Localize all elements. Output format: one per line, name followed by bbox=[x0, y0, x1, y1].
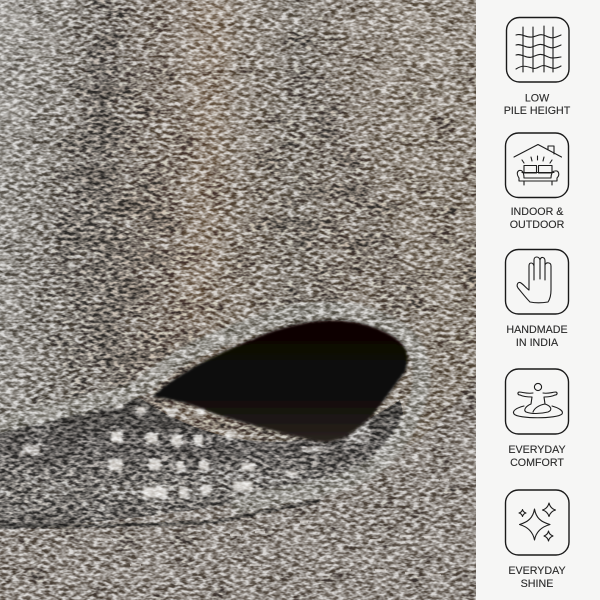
label: everyday shine: SHINE bbox=[521, 578, 553, 590]
feature: indoor and outdoor bbox=[506, 133, 568, 231]
label: low pile height: PILE HEIGHT bbox=[504, 105, 571, 117]
lower rug surface bbox=[0, 380, 476, 600]
photo: rolled rug bbox=[0, 0, 476, 600]
icon: open hand bbox=[506, 250, 568, 314]
icon: woven fibres bbox=[506, 18, 569, 82]
icon: house with sofa bbox=[506, 133, 568, 198]
label: everyday comfort: COMFORT bbox=[510, 457, 564, 469]
label: everyday comfort: EVERYDAY bbox=[508, 444, 566, 456]
feature: low pile height bbox=[504, 18, 571, 117]
label: everyday shine: EVERYDAY bbox=[508, 565, 566, 577]
label: handmade in india: IN INDIA bbox=[516, 337, 559, 349]
label: low pile height: LOW bbox=[525, 92, 550, 104]
sidebar panel bbox=[476, 0, 600, 600]
vertical stripe: warm highlight bbox=[176, 74, 221, 320]
label: indoor and outdoor: INDOOR & bbox=[511, 206, 563, 218]
inner flap bbox=[0, 398, 403, 530]
white stitch dashes bbox=[100, 480, 449, 575]
crease line bbox=[0, 500, 320, 526]
feature: handmade in india bbox=[506, 250, 568, 349]
vertical stripe: dark bbox=[30, 0, 130, 300]
light stitches on flap bbox=[22, 402, 370, 498]
feature: everyday comfort bbox=[506, 369, 568, 469]
hole: dark roll opening bbox=[152, 320, 408, 442]
feature: everyday shine bbox=[506, 490, 569, 590]
weave texture bbox=[0, 0, 476, 600]
mottled colour variation bbox=[0, 0, 476, 600]
roll edge binding bbox=[0, 310, 422, 505]
icon: meditating figure bbox=[506, 369, 568, 434]
label: indoor and outdoor: OUTDOOR bbox=[510, 219, 565, 231]
label: handmade in india: HANDMADE bbox=[506, 324, 568, 336]
icon: sparkles bbox=[506, 490, 569, 555]
roll shading bbox=[288, 42, 422, 324]
